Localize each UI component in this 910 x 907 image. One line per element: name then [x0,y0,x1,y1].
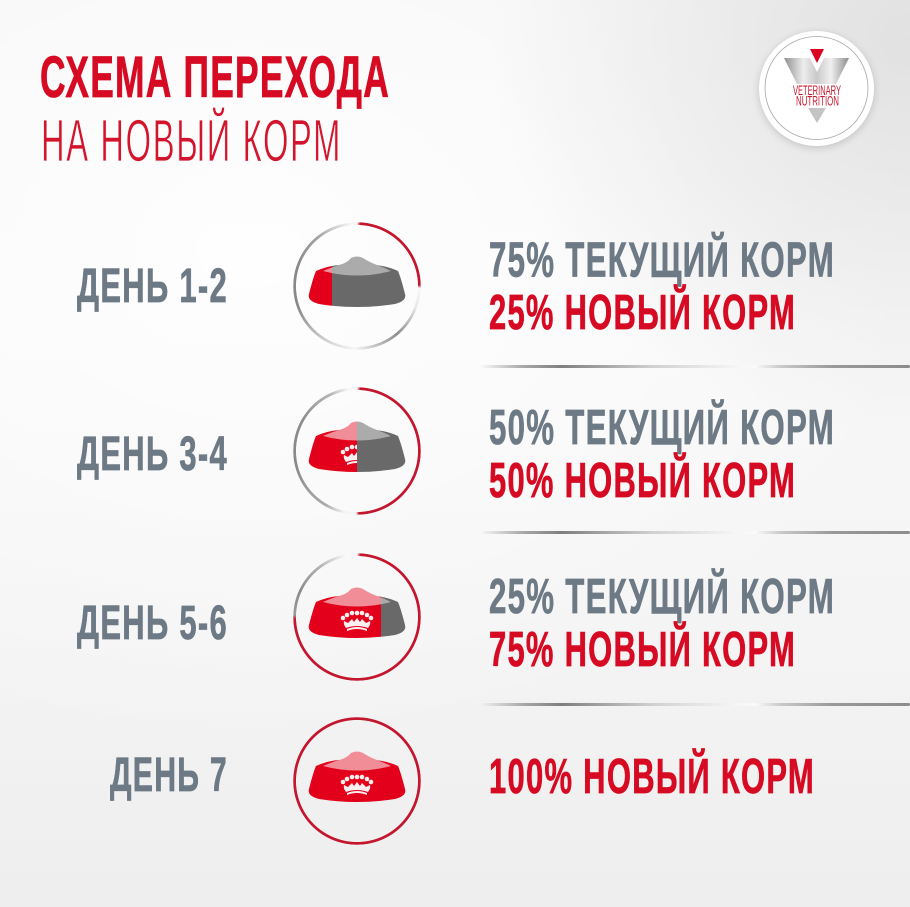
divider 1 [480,365,910,368]
icon: bowl day 7 [293,717,421,845]
icon: bowl day 1-2 [293,222,421,350]
label: day 3-4: ДЕНЬ 3-4 [77,428,228,481]
text: day 5-6 ratio [489,569,835,677]
text: day 3-4 ratio [489,400,835,508]
title: НА НОВЫЙ КОРМ [41,107,342,174]
divider 2 [480,531,910,534]
text: day 1-2 ratio [489,232,835,340]
title [40,45,390,174]
divider 3 [480,703,910,706]
title: СХЕМА ПЕРЕХОДА [40,45,390,110]
label: day 7: ДЕНЬ 7 [110,749,228,802]
icon: bowl day 3-4 [293,387,421,515]
icon: bowl day 5-6 [293,553,421,681]
label: day 5-6: ДЕНЬ 5-6 [77,597,228,650]
label: day 1-2: ДЕНЬ 1-2 [77,260,228,313]
icon: veterinary nutrition logo: NUTRITION [796,92,839,108]
icon: veterinary nutrition logo [759,31,874,146]
